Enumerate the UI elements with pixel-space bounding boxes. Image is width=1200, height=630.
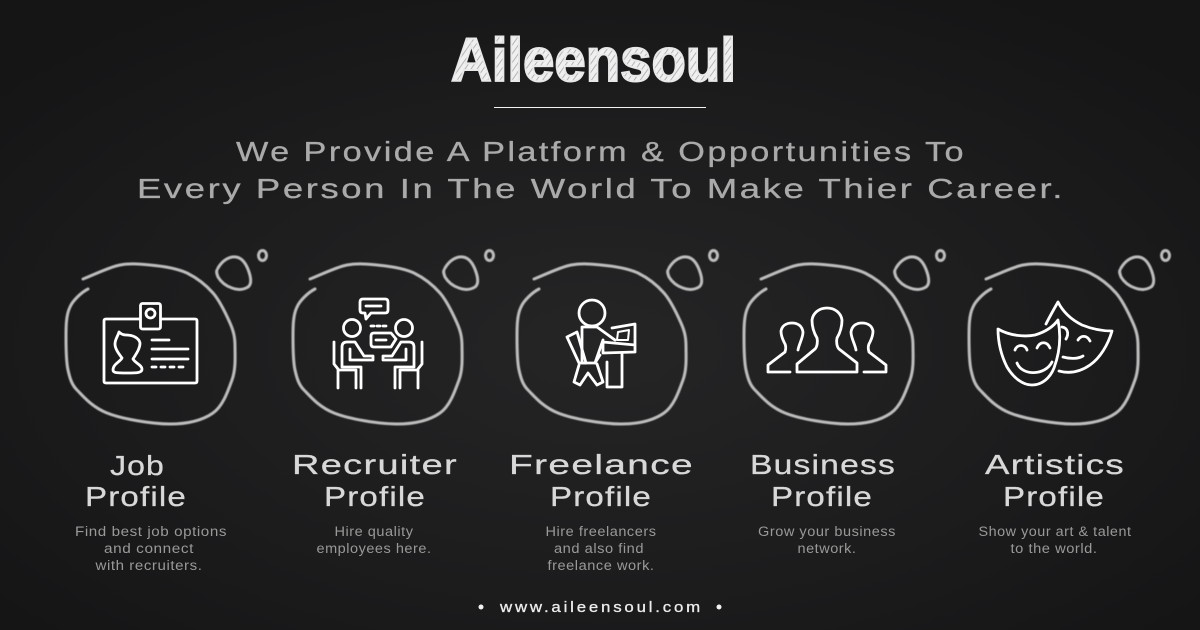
icon: theatre masks <box>998 302 1112 385</box>
thought bubble outline <box>969 250 1170 424</box>
icon: three people <box>768 308 886 372</box>
heading: Profile <box>771 481 873 512</box>
description: Hire quality <box>334 524 414 539</box>
panel: artistics profile <box>969 250 1170 556</box>
description: Show your art & talent <box>978 524 1132 539</box>
panel: freelance profile <box>509 250 718 573</box>
tagline: We Provide A Platform & Opportunities To <box>236 136 966 167</box>
icon: id card <box>104 304 197 383</box>
title underline <box>494 107 706 108</box>
description: to the world. <box>1010 541 1098 556</box>
heading: Profile <box>324 481 426 512</box>
heading: Artistics <box>985 449 1125 480</box>
footer website: www.aileensoul.com <box>499 599 703 616</box>
description: with recruiters. <box>94 558 202 573</box>
description: Grow your business <box>758 524 896 539</box>
description <box>546 524 656 573</box>
title: Aileensoul <box>451 26 736 94</box>
heading <box>750 449 896 512</box>
icon: person at laptop <box>567 300 635 387</box>
heading: Business <box>750 449 896 480</box>
description: network. <box>798 541 856 556</box>
description <box>978 524 1132 556</box>
thought bubble outline <box>517 250 718 424</box>
heading: Profile <box>550 481 652 512</box>
heading <box>509 449 694 512</box>
heading <box>292 449 458 512</box>
heading: Recruiter <box>292 449 458 480</box>
panel: recruiter profile <box>292 250 494 556</box>
heading: Profile <box>85 481 187 512</box>
thought bubble outline <box>744 250 944 424</box>
tagline: Every Person In The World To Make Thier Career. <box>137 173 1065 204</box>
thought bubble outline <box>293 250 494 424</box>
heading: Profile <box>1003 481 1105 512</box>
description: Hire freelancers <box>546 524 656 539</box>
heading <box>985 449 1125 512</box>
description: and connect <box>104 541 194 556</box>
description: employees here. <box>316 541 432 556</box>
heading: Job <box>110 450 165 481</box>
tagline <box>137 136 1065 204</box>
description <box>758 524 896 556</box>
description: freelance work. <box>548 558 654 573</box>
description: and also find <box>554 541 644 556</box>
description <box>75 524 227 573</box>
heading: Freelance <box>509 449 694 480</box>
description <box>316 524 432 556</box>
panel: business profile <box>744 250 944 556</box>
thought bubble outline <box>66 250 266 424</box>
panel: job profile <box>66 250 266 573</box>
description: Find best job options <box>75 524 227 539</box>
heading <box>85 450 187 512</box>
icon: meeting <box>334 299 422 388</box>
